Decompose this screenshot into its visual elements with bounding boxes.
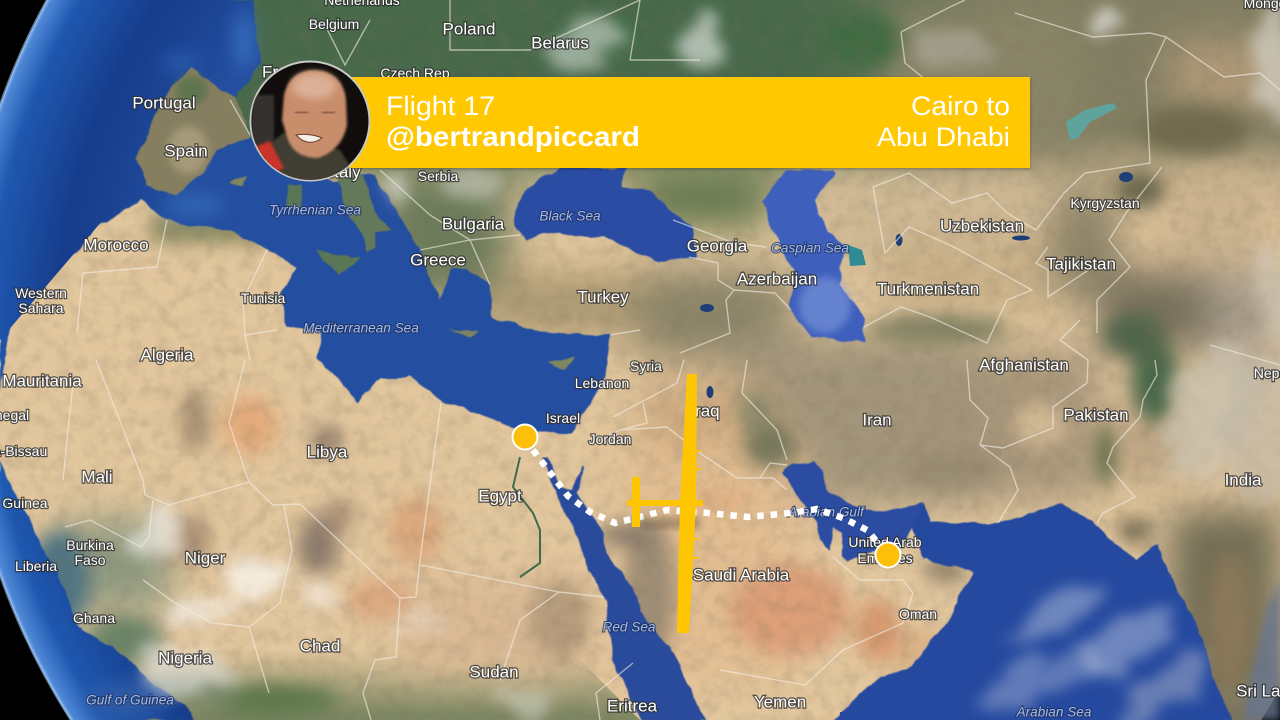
portrait background [250, 62, 370, 180]
engines [687, 450, 701, 559]
place labels: Guinea [2, 495, 48, 511]
place labels: Mauritania [2, 372, 82, 390]
red collar [256, 141, 284, 174]
place labels: Eritrea [607, 696, 658, 716]
place labels: Kazakhstan [916, 104, 1004, 122]
place labels: Iran [862, 410, 892, 430]
place labels: Libya [307, 442, 348, 462]
place labels: Liberia [15, 558, 57, 574]
place labels: Serbia [418, 168, 458, 184]
eye shadows [295, 112, 335, 113]
Italy, islands [228, 175, 576, 370]
Caspian Sea [762, 170, 864, 343]
Black Sea [515, 168, 696, 262]
Bay of Bengal [1243, 575, 1280, 720]
place labels: India [1225, 470, 1262, 490]
place labels: Tajikistan [1046, 254, 1116, 274]
portrait: Bertrand Piccard [250, 62, 370, 185]
Iberia interior [168, 126, 208, 174]
Arabian Sea bottom strip [840, 712, 1225, 720]
seat [252, 95, 274, 145]
place labels: Israel [546, 410, 580, 426]
place labels: Sudan [469, 662, 519, 682]
place labels: Tunisia [241, 290, 286, 306]
place labels: Iraq [690, 402, 720, 420]
place labels: Uzbekistan [940, 216, 1024, 236]
place labels: Chad [300, 636, 340, 656]
banner panel [350, 77, 1030, 168]
place labels: Syria [630, 358, 662, 374]
small lakes [700, 103, 1133, 398]
Iberia [137, 68, 250, 195]
atmosphere rim: upper arc [0, 0, 47, 105]
place labels: Ghana [73, 610, 115, 626]
place labels: Sahara [18, 300, 64, 316]
icon: Solar Impulse plane shadow [640, 518, 700, 528]
bald top highlight [292, 73, 336, 99]
flight number: Flight 17 [386, 91, 495, 121]
place labels: Belarus [531, 34, 589, 52]
place labels: Arabian Gulf [787, 504, 865, 520]
place labels: Pakistan [1063, 406, 1129, 424]
atmosphere rim: lower arc [0, 575, 71, 720]
place labels: Turkey [577, 288, 629, 306]
place labels: Bulgaria [442, 214, 505, 234]
place labels: Fr [262, 62, 278, 82]
place labels: Poland [443, 20, 495, 38]
marker: Cairo [512, 424, 538, 450]
place labels: Black Sea [539, 208, 601, 224]
place labels: Caspian Sea [771, 240, 849, 256]
Persian Gulf [783, 460, 945, 563]
face [282, 70, 347, 158]
jacket [260, 132, 351, 180]
place labels: Italy [329, 162, 361, 182]
place labels: Turkmenistan [877, 280, 979, 298]
Iberia green north [176, 76, 208, 104]
place labels: Spain [164, 142, 208, 160]
place labels: Lebanon [575, 375, 629, 391]
place labels: Oman [899, 606, 937, 622]
place labels: Kyrgyzstan [1070, 195, 1140, 211]
fuselage [627, 500, 703, 506]
place labels: Portugal [132, 94, 196, 112]
place labels: Nigeria [158, 648, 212, 668]
place labels: Arabian Sea [1016, 704, 1092, 720]
Arabian Sea [832, 503, 1232, 720]
place labels: United Arab [848, 534, 922, 550]
tail [632, 477, 640, 527]
place labels: Tyrrhenian Sea [269, 202, 361, 218]
place labels: Morocco [83, 236, 149, 254]
route origin: Cairo to [911, 91, 1010, 121]
place labels: Saudi Arabia [693, 566, 790, 584]
place labels: Mali [81, 468, 113, 486]
banner background [350, 77, 1030, 168]
flight route: dotted line [533, 450, 888, 555]
smile [296, 134, 322, 142]
place labels: Czech Rep [380, 65, 450, 81]
place labels: Georgia [687, 236, 748, 256]
place labels: Afghanistan [979, 356, 1069, 374]
place labels: Niger [185, 548, 226, 568]
place labels: Faso [74, 552, 106, 568]
Kara-Bogaz lagoon [848, 245, 866, 266]
place labels: Azerbaijan [737, 270, 817, 288]
place labels: Yemen [754, 692, 806, 712]
place labels: Egypt [478, 486, 522, 506]
Red Sea [543, 457, 705, 720]
marker: Abu Dhabi [876, 542, 900, 568]
place labels: Jordan [589, 431, 631, 447]
twitter handle: @bertrandpiccard [386, 121, 640, 152]
place labels: Greece [410, 250, 466, 270]
Red Sea bottom strip [650, 712, 700, 720]
place labels: Gulf of Guinea [86, 692, 174, 708]
place labels: Western [15, 285, 67, 301]
place labels: Red Sea [603, 620, 656, 634]
wing [677, 374, 697, 633]
place labels: Burkina [66, 537, 114, 553]
Caspian cloud streak [799, 277, 851, 333]
place labels: Mediterranean Sea [303, 320, 419, 336]
lighter shelf seas [85, 10, 251, 716]
icon: Solar Impulse plane [627, 374, 703, 633]
Atlantic and Mediterranean [0, 0, 610, 720]
place labels: Algeria [141, 346, 194, 364]
route destination: Abu Dhabi [877, 122, 1010, 152]
place labels: Belgium [309, 16, 359, 32]
Nile [513, 457, 540, 577]
place labels: Emirates [857, 550, 913, 566]
ocean edge fill [0, 0, 230, 720]
